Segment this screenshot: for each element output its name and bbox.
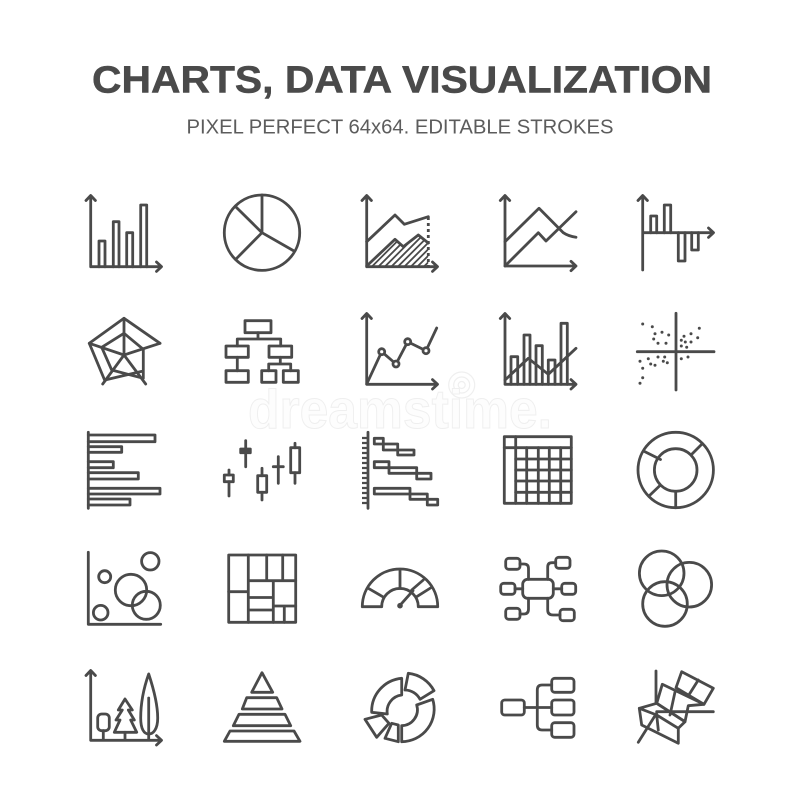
icon: 3D surface chart — [638, 671, 713, 743]
icon: tree height chart — [86, 670, 162, 745]
icon: line chart with dots — [362, 314, 438, 389]
icon: flow tree — [502, 678, 574, 737]
icon: bar chart — [86, 196, 162, 271]
icon: area chart — [360, 194, 439, 273]
icon: candlestick chart — [224, 441, 300, 500]
icon: treemap — [229, 555, 296, 622]
icon: data table — [504, 437, 571, 503]
icon: gantt chart — [362, 432, 438, 508]
icon: venn diagram — [639, 551, 712, 626]
icon: line chart — [500, 196, 576, 271]
icon: exploded donut chart — [365, 673, 434, 742]
icon: horizontal bar chart — [88, 432, 160, 508]
icon: gauge — [362, 569, 438, 608]
icon: pyramid chart — [224, 673, 300, 741]
icon: bubble chart — [88, 552, 161, 624]
icon: donut chart — [638, 432, 713, 508]
icon: positive negative bars — [638, 196, 714, 270]
title: CHARTS, DATA VISUALIZATION — [92, 59, 712, 101]
icon: combo bars and line — [500, 314, 576, 389]
watermark: dreamstime. — [248, 378, 552, 440]
icon: mind map — [501, 557, 576, 621]
icon: pie chart — [224, 195, 300, 270]
icon: scatter plot — [637, 313, 714, 390]
icon: radar chart — [89, 318, 160, 384]
subtitle: PIXEL PERFECT 64x64. EDITABLE STROKES — [186, 116, 614, 138]
icon: hierarchy diagram — [226, 321, 298, 382]
